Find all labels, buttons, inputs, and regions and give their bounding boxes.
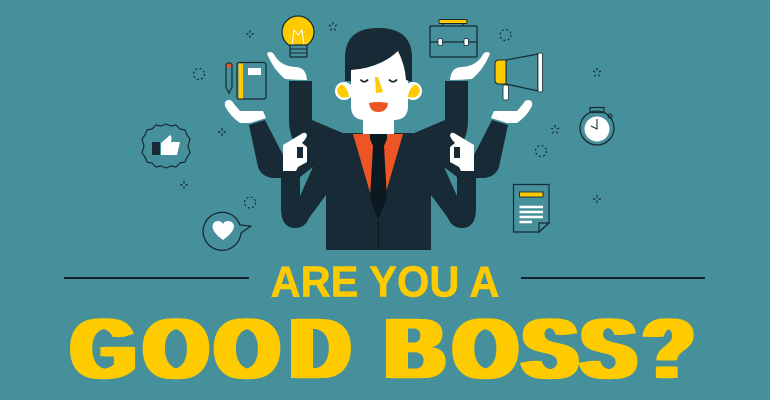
heading: good boss: O	[454, 302, 517, 397]
left eye	[360, 80, 368, 82]
left divider line	[64, 277, 249, 279]
heading: are you a: ARE YOU A	[270, 258, 500, 306]
right eye	[389, 80, 397, 82]
right ear	[404, 82, 422, 100]
upper right arm	[412, 81, 468, 175]
neck	[363, 112, 394, 135]
icon: megaphone	[495, 53, 542, 100]
left gesture hand	[283, 133, 307, 171]
heading: good boss: S	[523, 302, 577, 397]
heading: good boss: ?	[644, 302, 693, 397]
right ear inner	[408, 84, 420, 98]
lower right arm	[474, 120, 508, 178]
icon: light bulb	[282, 16, 314, 57]
business man figure	[225, 28, 532, 250]
icon: briefcase	[430, 20, 477, 57]
suit jacket	[281, 133, 476, 250]
heading: good boss: O	[145, 302, 207, 397]
upper left hand	[267, 52, 307, 80]
lower left arm	[249, 120, 283, 178]
tie	[370, 134, 387, 220]
icon: thumbs up badge	[142, 124, 190, 168]
face	[351, 48, 408, 120]
upper right hand	[450, 52, 490, 80]
gap between left arm and body	[300, 167, 313, 196]
nose	[375, 77, 383, 93]
heading: good boss	[70, 302, 694, 397]
heading: good boss: O	[216, 302, 278, 397]
icon: stopwatch	[580, 108, 614, 145]
right gesture hand	[450, 133, 474, 171]
heading: good boss: S	[582, 302, 635, 397]
lower right hand	[491, 100, 532, 123]
hair	[345, 28, 412, 82]
shirt	[353, 134, 403, 220]
heading: good boss: B	[386, 302, 444, 397]
left ear inner	[337, 84, 349, 98]
mouth	[369, 102, 388, 112]
gap between right arm and body	[444, 167, 457, 196]
right divider line	[521, 277, 705, 279]
lower left hand	[225, 100, 266, 123]
heading: good boss: D	[291, 302, 349, 397]
decorative dotted circles and sparkles	[180, 22, 601, 208]
left ear	[335, 82, 353, 100]
icon: pencil	[226, 63, 232, 93]
upper left arm	[289, 81, 345, 175]
icon: document	[514, 184, 549, 232]
icon: notebook	[237, 62, 266, 99]
icon: heart speech bubble	[203, 212, 251, 250]
heading: good boss: G	[72, 302, 135, 397]
jacket centre seam	[378, 220, 380, 250]
